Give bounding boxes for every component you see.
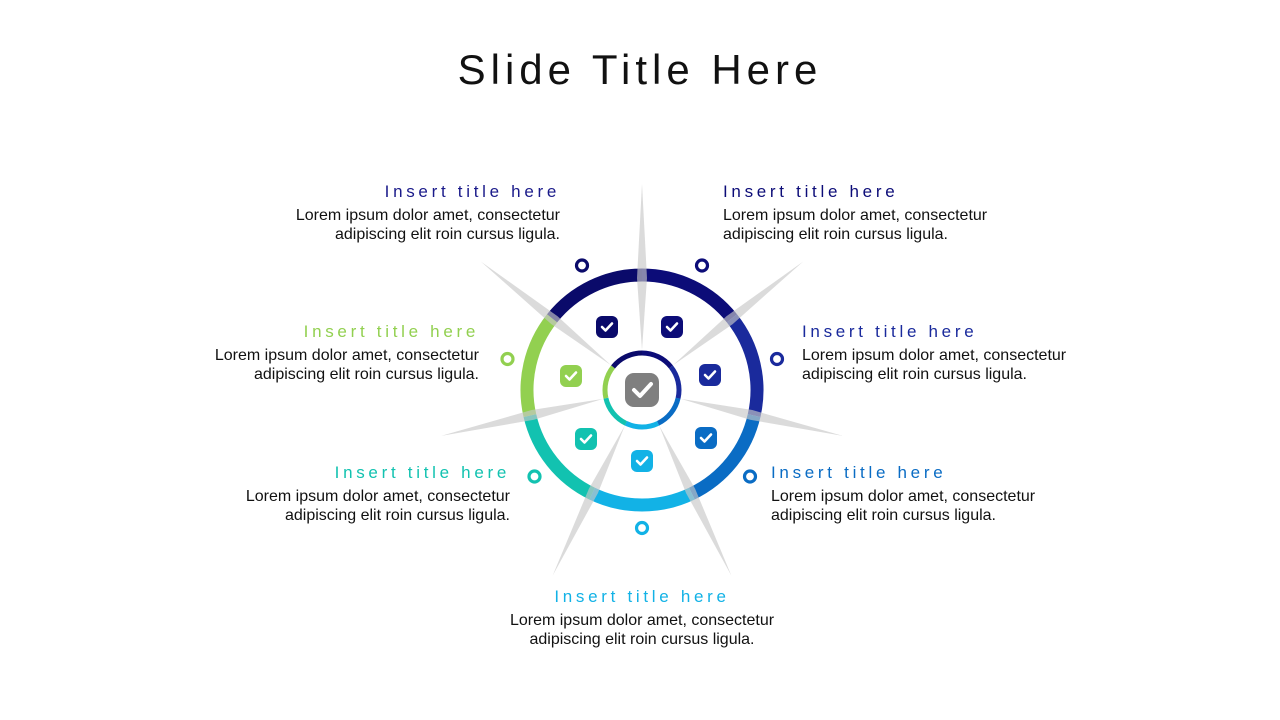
- text: left: [215, 322, 479, 383]
- check icons: [560, 316, 721, 472]
- text: right: adipiscing elit roin cursus ligula.: [802, 366, 1027, 383]
- text: bottom-left: Lorem ipsum dolor amet, consectetur: [246, 488, 510, 505]
- text: top-left: Insert title here: [385, 182, 560, 201]
- spokes: [440, 184, 844, 578]
- text: bottom-right: [771, 463, 1035, 524]
- text: top-right: Insert title here: [723, 182, 898, 201]
- text: bottom-right: adipiscing elit roin cursus ligula.: [771, 507, 996, 524]
- text: top-right: Lorem ipsum dolor amet, consectetur: [723, 207, 987, 224]
- text: top-right: [723, 182, 987, 243]
- text: right: [802, 322, 1066, 383]
- text: left: Lorem ipsum dolor amet, consectetur: [215, 347, 479, 364]
- text: left: adipiscing elit roin cursus ligula.: [254, 366, 479, 383]
- text: left: Insert title here: [304, 322, 479, 341]
- text: bottom: adipiscing elit roin cursus ligula.: [530, 631, 754, 648]
- text: bottom-right: Insert title here: [771, 463, 946, 482]
- text: top-left: [296, 182, 560, 243]
- text: right: Lorem ipsum dolor amet, consectetur: [802, 347, 1066, 364]
- inner ring: [590, 338, 694, 442]
- title: Slide Title Here: [458, 46, 822, 93]
- text: bottom-left: Insert title here: [335, 463, 510, 482]
- outer ring: [480, 228, 804, 552]
- text: bottom: Insert title here: [554, 587, 730, 606]
- text: bottom-left: adipiscing elit roin cursus ligula.: [285, 507, 510, 524]
- text: top-right: adipiscing elit roin cursus ligula.: [723, 226, 948, 243]
- text: bottom: Lorem ipsum dolor amet, consectetur: [510, 612, 774, 629]
- marker dots: [502, 260, 782, 534]
- text: top-left: Lorem ipsum dolor amet, consectetur: [296, 207, 560, 224]
- text: right: Insert title here: [802, 322, 977, 341]
- center icon: [625, 373, 659, 407]
- text: bottom-right: Lorem ipsum dolor amet, consectetur: [771, 488, 1035, 505]
- text: bottom-left: [246, 463, 510, 524]
- text: top-left: adipiscing elit roin cursus ligula.: [335, 226, 560, 243]
- text: bottom: [510, 587, 774, 648]
